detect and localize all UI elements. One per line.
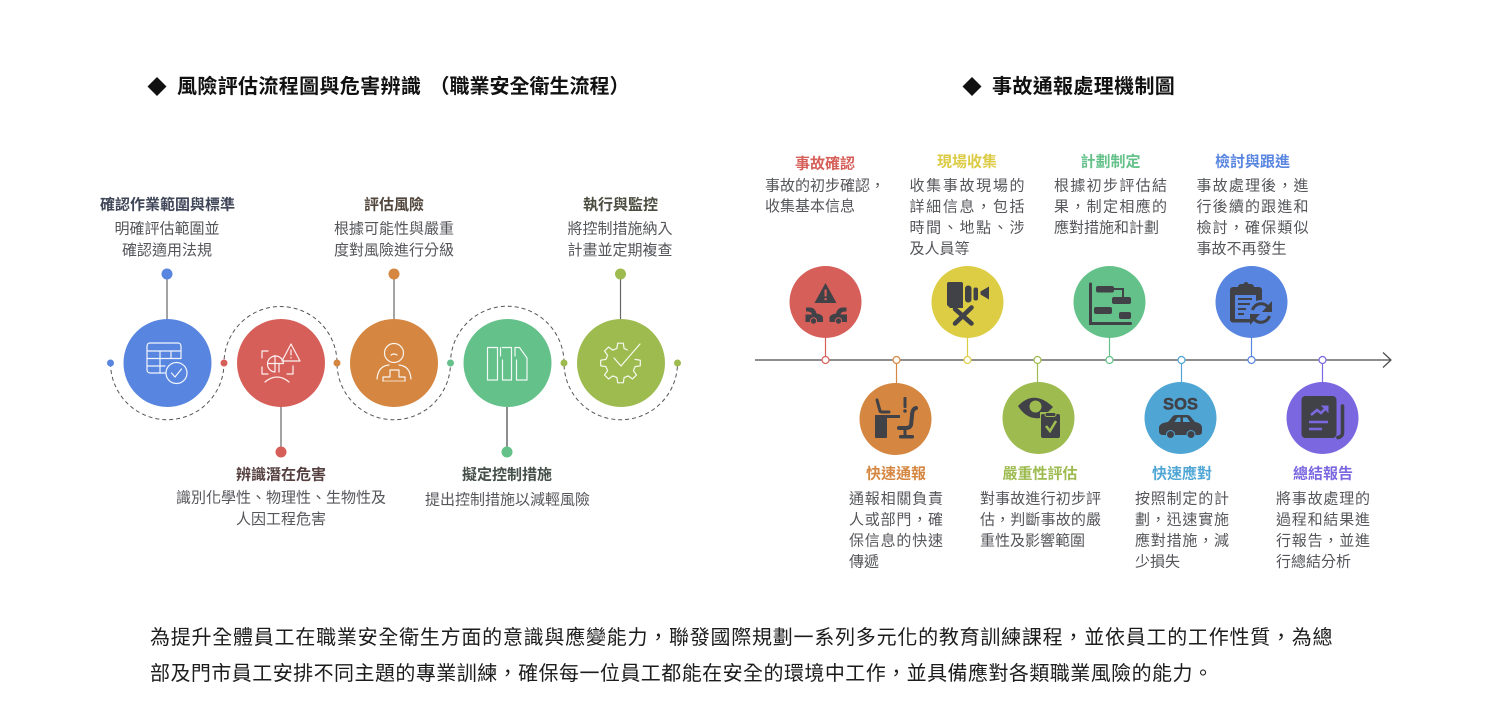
- event 2: quick report: 快速通報: [866, 464, 926, 482]
- icon: panels: [488, 348, 527, 380]
- step 3: evaluate: 評估風險: [364, 196, 424, 214]
- event 3: collect on site: 現場收集: [937, 152, 997, 170]
- icon: hazard scan: [262, 344, 300, 382]
- icon: SOS car: [1159, 396, 1202, 438]
- event 6: respond: 快速應對: [1152, 464, 1212, 482]
- event 6: respond: [1135, 356, 1229, 570]
- timeline arrow: [755, 352, 1391, 368]
- text block: training summary: 部及門市員工安排不同主題的專業訓練，確保每一位員工都能在安全的環境中工作，並具備應對各類職業風險的能力。: [150, 661, 1213, 685]
- event 8: summary report: 將事故處理的: [1276, 490, 1370, 508]
- icon: warning and cars: [806, 283, 847, 324]
- event 3: collect on site: 及人員等: [910, 240, 970, 258]
- event 4: severity: 重性及影響範圍: [980, 532, 1085, 550]
- icon: gear with check: [601, 343, 640, 383]
- step 1: scope: 確認作業範圍與標準: [100, 196, 235, 214]
- event 3: collect on site: 收集事故現場的: [910, 178, 1024, 194]
- step 2: hazards: [176, 319, 386, 528]
- step 1: scope: 確認適用法規: [122, 241, 212, 259]
- event 7: review: [1196, 152, 1308, 364]
- event 4: severity: [980, 356, 1101, 550]
- event 8: summary report: [1276, 356, 1370, 570]
- event 3: collect on site: 詳細信息，包括: [910, 198, 1024, 216]
- event 7: review: 事故不再發生: [1196, 240, 1287, 258]
- title: risk assessment: 風險評估流程圖與危害辨識: [177, 74, 421, 98]
- step 5: monitor: [567, 196, 673, 407]
- event 6: respond: 按照制定的計: [1135, 490, 1229, 508]
- event 7: review: 行後續的跟進和: [1196, 198, 1308, 216]
- panel: incident timeline: [755, 152, 1391, 570]
- title: risk assessment: （職業安全衛生流程）: [430, 74, 630, 98]
- title: risk assessment: [148, 74, 630, 98]
- icon: gantt chart: [1090, 284, 1131, 324]
- step 3: evaluate: 根據可能性與嚴重: [334, 220, 454, 238]
- step 3: evaluate: [334, 196, 454, 407]
- event 1: confirm: 收集基本信息: [765, 198, 855, 215]
- event 3: collect on site: [910, 152, 1024, 364]
- event 2: quick report: 人或部門，確: [849, 512, 943, 528]
- icon: desk and chair: [875, 397, 916, 438]
- step 4: controls: [425, 319, 590, 508]
- step 4: controls: 擬定控制措施: [462, 466, 552, 484]
- event 4: severity: 對事故進行初步評: [980, 490, 1101, 508]
- icon: person with bars: [377, 344, 411, 381]
- event 3: collect on site: 時間、地點、涉: [910, 220, 1024, 236]
- event 8: summary report: 過程和結果進: [1276, 512, 1370, 528]
- step 4: controls: 提出控制措施以減輕風險: [425, 492, 590, 508]
- panel: risk assessment flow: [100, 196, 681, 528]
- event 6: respond: 應對措施，減: [1135, 532, 1229, 550]
- event 2: quick report: [849, 356, 943, 570]
- event 8: summary report: 總結報告: [1293, 464, 1353, 482]
- event 4: severity: 估，判斷事故的嚴: [980, 512, 1101, 528]
- icon: camera with cross: [947, 282, 989, 324]
- event 5: plan: [1054, 152, 1167, 364]
- event 7: review: 事故處理後，進: [1196, 178, 1308, 194]
- event 6: respond: 劃，迅速實施: [1135, 510, 1229, 528]
- event 2: quick report: 保信息的快速: [849, 532, 943, 550]
- event 1: confirm: 事故的初步確認，: [765, 178, 885, 194]
- title: incident reporting: 事故通報處理機制圖: [992, 75, 1175, 98]
- event 5: plan: 計劃制定: [1080, 152, 1141, 170]
- event 5: plan: 果，制定相應的: [1054, 198, 1167, 216]
- icon: clipboard refresh: [1230, 282, 1274, 326]
- step 5: monitor: 執行與監控: [583, 196, 658, 214]
- step 2: hazards: 辨識潛在危害: [236, 466, 326, 484]
- event 2: quick report: 通報相關負責: [849, 490, 943, 508]
- icon: SOS car: SOS: [1163, 396, 1198, 414]
- event 7: review: 檢討，確保類似: [1196, 220, 1308, 236]
- step 2: hazards: 識別化學性、物理性、生物性及: [176, 488, 386, 506]
- event 7: review: 檢討與跟進: [1215, 152, 1290, 170]
- icon: table with check: [147, 343, 187, 384]
- icon: report with trend: [1302, 396, 1342, 438]
- icon: eye and clipboard: [1018, 398, 1060, 438]
- text block: training summary: 為提升全體員工在職業安全衛生方面的意識與應變能力，聯發國際規劃一系列多元化的教育訓練課程，並依員工的工作性質，為總: [150, 625, 1333, 649]
- event 8: summary report: 行總結分析: [1276, 554, 1351, 570]
- event 8: summary report: 行報告，並進: [1276, 532, 1370, 550]
- step 1: scope: 明確評估範圍並: [114, 220, 220, 238]
- step 3: evaluate: 度對風險進行分級: [334, 242, 454, 259]
- step 5: monitor: 計畫並定期複查: [567, 242, 673, 259]
- event 1: confirm: 事故確認: [795, 154, 855, 172]
- event 5: plan: 根據初步評估結: [1054, 178, 1167, 194]
- step 5: monitor: 將控制措施納入: [567, 220, 673, 238]
- event 2: quick report: 傳遞: [849, 554, 879, 570]
- event 1: confirm: [765, 154, 885, 364]
- step 2: hazards: 人因工程危害: [236, 511, 326, 528]
- event 6: respond: 少損失: [1135, 554, 1180, 570]
- event 4: severity: 嚴重性評估: [1002, 464, 1078, 482]
- dashed connecting wave: [110, 306, 678, 420]
- event 5: plan: 應對措施和計劃: [1054, 218, 1159, 236]
- step 1: scope: [100, 196, 235, 407]
- text block: training summary: [150, 625, 1333, 685]
- wave dots: [107, 360, 681, 366]
